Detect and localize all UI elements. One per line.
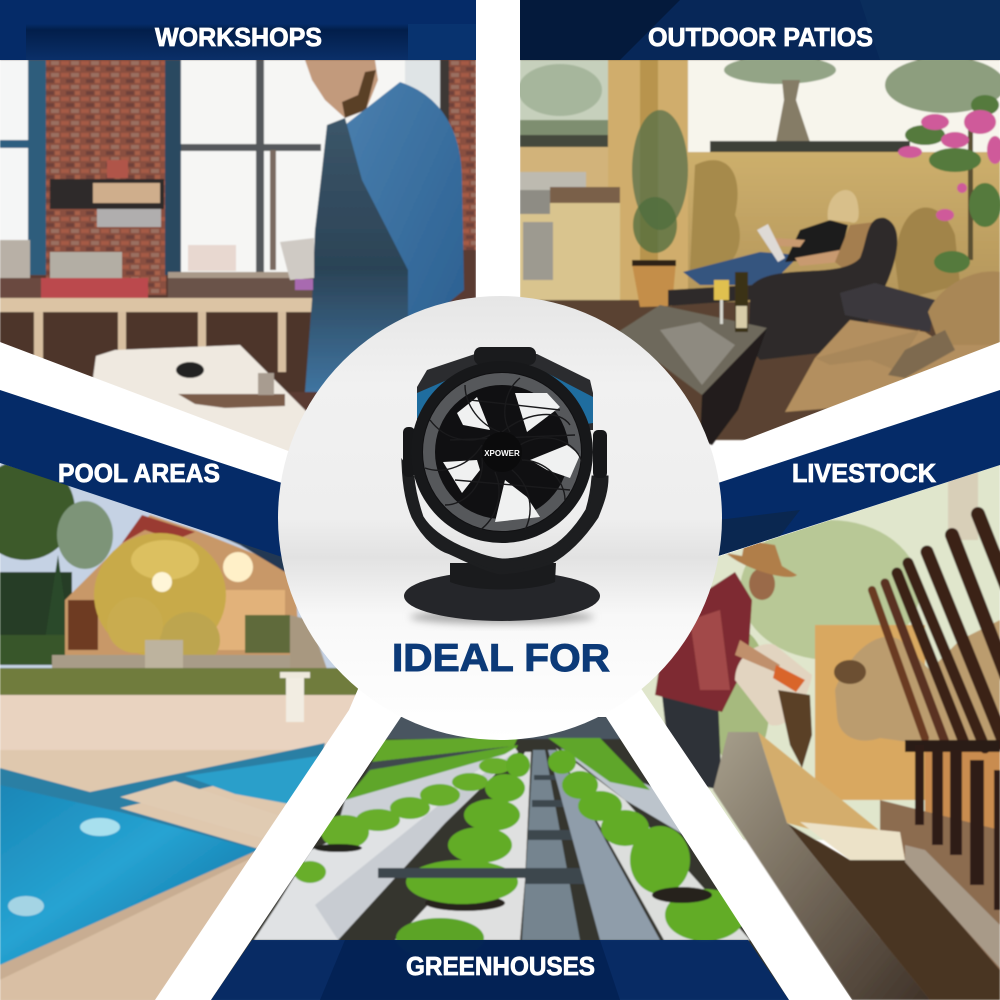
panel: workshops [0,60,476,451]
farmer [662,695,722,790]
heading: livestock: LIVESTOCK [792,458,936,488]
glass table [618,305,767,395]
panel: outdoor patios [520,60,1000,446]
photo: patio scene [520,60,1000,446]
pool water [0,743,325,975]
sofa [927,272,1000,346]
band: greenhouses heading bar [211,940,789,1000]
centre steel [522,750,580,940]
fan housing [417,354,593,430]
panel: greenhouses [200,715,800,1000]
fan yoke [403,463,607,573]
woman [683,252,800,285]
heading: greenhouses: GREENHOUSES [406,951,595,981]
logo: xpower: XPOWER [484,449,520,458]
band: workshops heading bar [0,0,476,60]
photo: livestock scene [642,465,1000,1000]
panel: livestock [642,465,1000,1000]
band: livestock heading bar [718,390,1000,556]
plants right [548,750,745,941]
right rail [548,750,660,940]
plants left [294,758,511,883]
fan cage and blades [411,361,593,543]
centre gutter [395,752,531,940]
photo: greenhouse scene [200,715,800,1000]
heading: pool areas: POOL AREAS [58,458,220,488]
flowers [968,130,973,260]
icon: fan product [403,347,607,624]
band: pool areas heading bar [0,390,282,557]
far rows [372,737,518,762]
wicker chair [668,218,897,360]
feed trough [758,732,878,830]
heading: workshops: WORKSHOPS [155,22,322,52]
near left gutter [254,748,518,940]
fence posts [872,514,1000,748]
photo: workshop scene [0,60,476,451]
panel: pool areas [0,463,358,1000]
fan base [404,571,600,621]
worker [305,60,378,118]
heading: outdoor patios: OUTDOOR PATIOS [648,22,873,52]
band: outdoor patios heading bar [520,0,1000,60]
heading: ideal for: IDEAL FOR [392,637,610,680]
centre circle [278,296,722,740]
photo: pool scene [0,463,358,1000]
